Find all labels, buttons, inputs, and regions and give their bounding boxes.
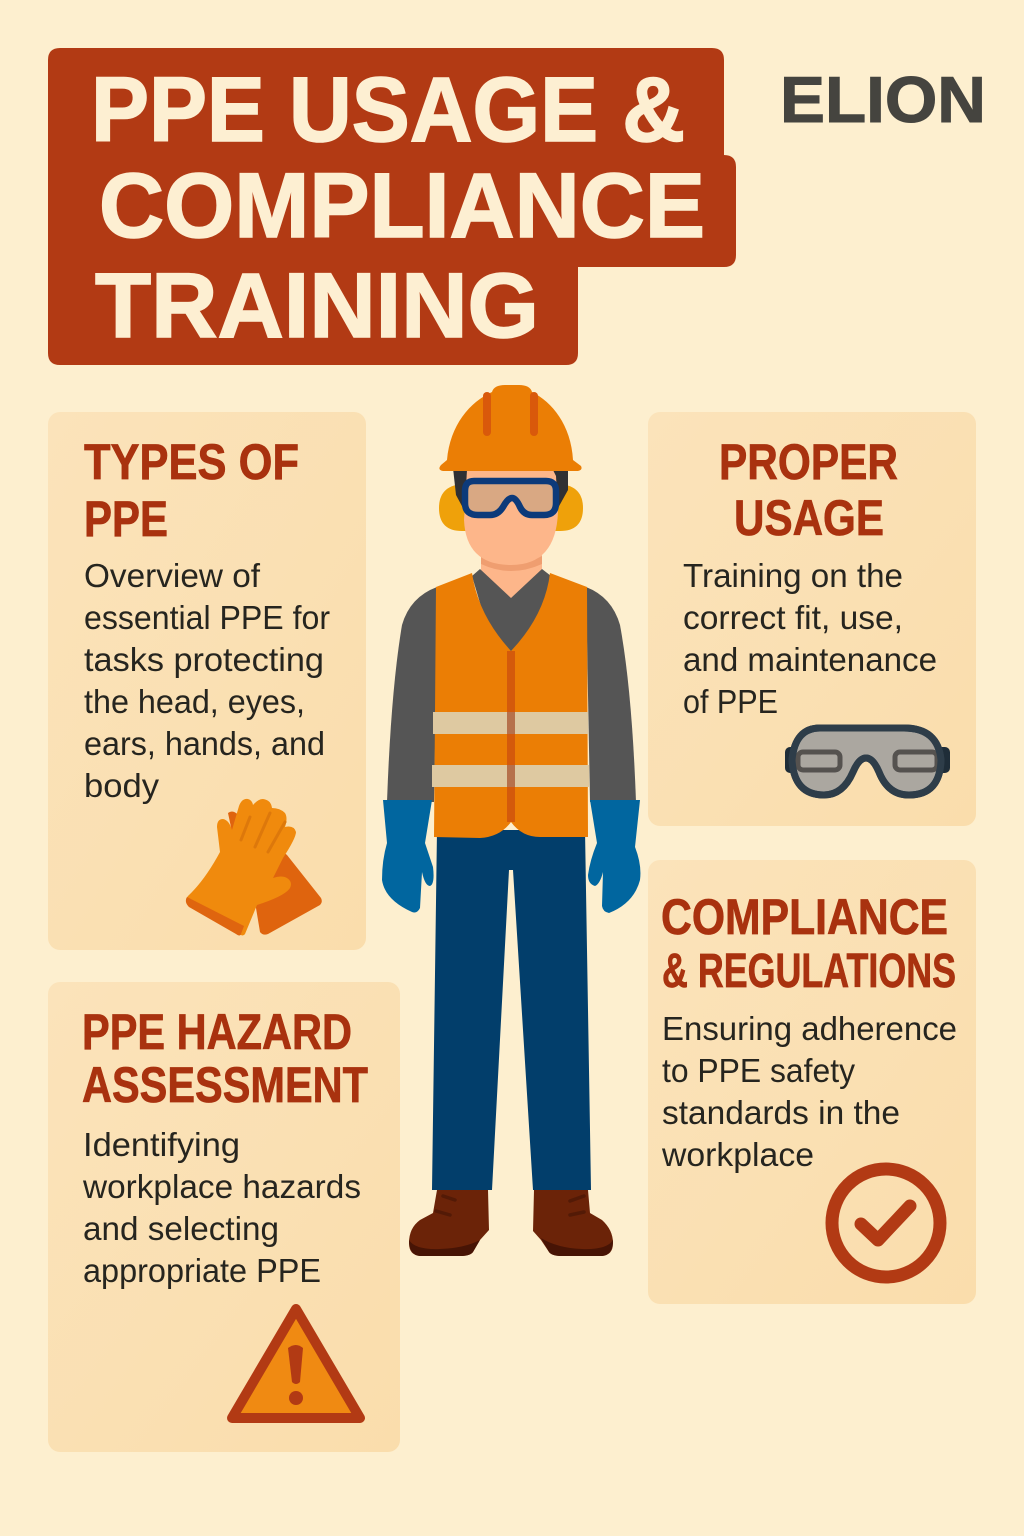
panel: types of PPE xyxy=(48,412,366,950)
goggles xyxy=(465,481,556,515)
heading: types of PPE: TYPES OF xyxy=(84,434,299,490)
safety vest xyxy=(432,573,589,838)
text: types of PPE description: the head, eyes, xyxy=(84,683,305,720)
text: types of PPE description: tasks protecting xyxy=(84,641,324,678)
worker figure xyxy=(382,385,640,1256)
panel: PPE hazard assessment xyxy=(48,982,400,1452)
icon: warning triangle xyxy=(232,1309,360,1418)
heading: proper usage: USAGE xyxy=(734,490,884,546)
heading: compliance and regulations xyxy=(661,889,956,998)
gloves xyxy=(382,800,640,913)
text: hazard description: appropriate PPE xyxy=(83,1252,321,1289)
title: PPE USAGE & xyxy=(91,59,685,161)
title: COMPLIANCE xyxy=(99,155,705,257)
helmet xyxy=(439,385,582,471)
text: hazard description: and selecting xyxy=(83,1210,279,1247)
trousers xyxy=(432,830,591,1190)
ear muffs xyxy=(439,484,583,531)
text: proper usage description: of PPE xyxy=(683,683,778,720)
text: compliance description: workplace xyxy=(661,1136,814,1173)
text: compliance description: standards in the xyxy=(662,1094,900,1131)
text: compliance description: to PPE safety xyxy=(662,1052,855,1089)
icon: check mark xyxy=(832,1169,940,1277)
panel: compliance and regulations xyxy=(648,860,976,1304)
text: proper usage description xyxy=(683,557,937,720)
text: hazard description xyxy=(82,1126,361,1289)
heading: PPE hazard assessment: PPE HAZARD xyxy=(82,1004,352,1060)
heading: proper usage: PROPER xyxy=(719,434,898,490)
logo: ELION xyxy=(780,63,986,136)
title: TRAINING xyxy=(95,255,539,357)
heading: proper usage xyxy=(719,434,898,546)
text: proper usage description: correct fit, use, xyxy=(683,599,903,636)
title xyxy=(48,48,736,365)
text: hazard description: workplace hazards xyxy=(82,1168,361,1205)
heading: compliance and regulations: COMPLIANCE xyxy=(661,889,948,945)
face xyxy=(464,470,558,565)
text: hazard description: Identifying xyxy=(83,1126,240,1163)
heading: PPE hazard assessment: ASSESSMENT xyxy=(82,1057,368,1113)
hair xyxy=(453,468,568,508)
panel: proper usage xyxy=(648,412,976,826)
text: compliance description: Ensuring adherence xyxy=(662,1010,957,1047)
grey shirt collar xyxy=(472,569,551,652)
text: types of PPE description: essential PPE for xyxy=(84,599,330,636)
boots xyxy=(409,1190,613,1256)
icon: safety goggles xyxy=(785,728,950,795)
heading: PPE hazard assessment xyxy=(82,1004,368,1113)
text: types of PPE description: ears, hands, and xyxy=(84,725,325,762)
neck xyxy=(481,550,542,600)
text: types of PPE description: body xyxy=(84,767,160,804)
heading: types of PPE xyxy=(84,434,299,547)
text: compliance description xyxy=(661,1010,957,1173)
text: types of PPE description: Overview of xyxy=(84,557,261,594)
heading: types of PPE: PPE xyxy=(84,491,168,547)
icon: gloves xyxy=(186,799,322,936)
sleeves xyxy=(387,587,636,802)
text: proper usage description: and maintenance xyxy=(683,641,937,678)
text: types of PPE description xyxy=(84,557,330,804)
text: proper usage description: Training on the xyxy=(683,557,903,594)
